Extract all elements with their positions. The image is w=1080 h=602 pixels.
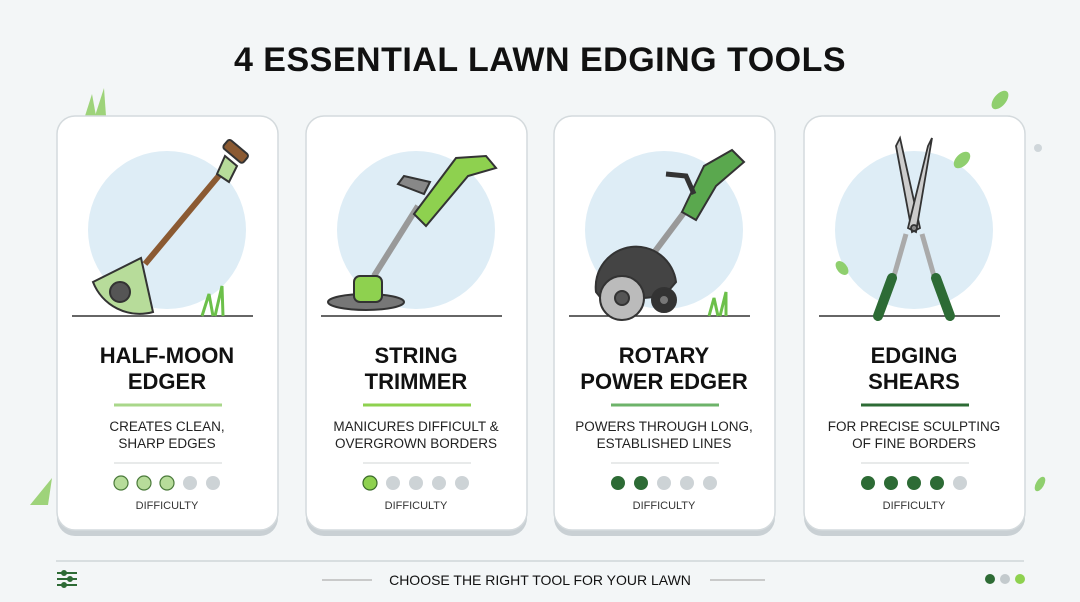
panel: string trimmer: OVERGROWN BORDERS bbox=[335, 436, 497, 451]
heading: ROTARY bbox=[619, 343, 710, 368]
difficulty dots bbox=[114, 476, 220, 490]
panel: string trimmer: TRIMMER bbox=[365, 369, 467, 394]
difficulty dots bbox=[363, 476, 469, 490]
panel: half-moon edger: SHARP EDGES bbox=[118, 436, 216, 451]
panel: rotary power edger: DIFFICULTY bbox=[633, 500, 696, 512]
icon: rotary power edger bbox=[596, 150, 744, 320]
panel: rotary power edger: POWER EDGER bbox=[580, 369, 748, 394]
description: FOR PRECISE SCULPTING bbox=[828, 419, 1000, 434]
panel: half-moon edger bbox=[57, 116, 278, 536]
panel: edging shears bbox=[804, 116, 1025, 536]
panel: rotary power edger: ESTABLISHED LINES bbox=[597, 436, 731, 451]
title: 4 ESSENTIAL LAWN EDGING TOOLS bbox=[234, 41, 846, 79]
decoration: leaves right bbox=[972, 88, 1047, 493]
description: MANICURES DIFFICULT & bbox=[333, 419, 499, 434]
description: CREATES CLEAN, bbox=[109, 419, 225, 434]
panel: rotary power edger bbox=[554, 116, 775, 536]
decoration: grass left bbox=[30, 88, 106, 505]
panel: half-moon edger: EDGER bbox=[128, 369, 206, 394]
heading: HALF-MOON bbox=[100, 343, 234, 368]
panel: half-moon edger: DIFFICULTY bbox=[136, 500, 199, 512]
panel: string trimmer: DIFFICULTY bbox=[385, 500, 448, 512]
panel: edging shears: DIFFICULTY bbox=[883, 500, 946, 512]
heading: STRING bbox=[374, 343, 458, 368]
panel: string trimmer bbox=[306, 116, 527, 536]
icon: string trimmer bbox=[328, 156, 496, 310]
difficulty dots bbox=[861, 476, 967, 490]
icon: half-moon edger bbox=[93, 139, 249, 314]
panel: edging shears: SHEARS bbox=[868, 369, 960, 394]
icon: edging shears bbox=[878, 138, 950, 316]
heading: EDGING bbox=[871, 343, 957, 368]
icon: sliders bbox=[57, 571, 77, 587]
description: POWERS THROUGH LONG, bbox=[575, 419, 753, 434]
difficulty dots bbox=[611, 476, 717, 490]
panel: edging shears: OF FINE BORDERS bbox=[852, 436, 976, 451]
footer text: CHOOSE THE RIGHT TOOL FOR YOUR LAWN bbox=[389, 572, 691, 588]
footer dots bbox=[985, 574, 1025, 584]
